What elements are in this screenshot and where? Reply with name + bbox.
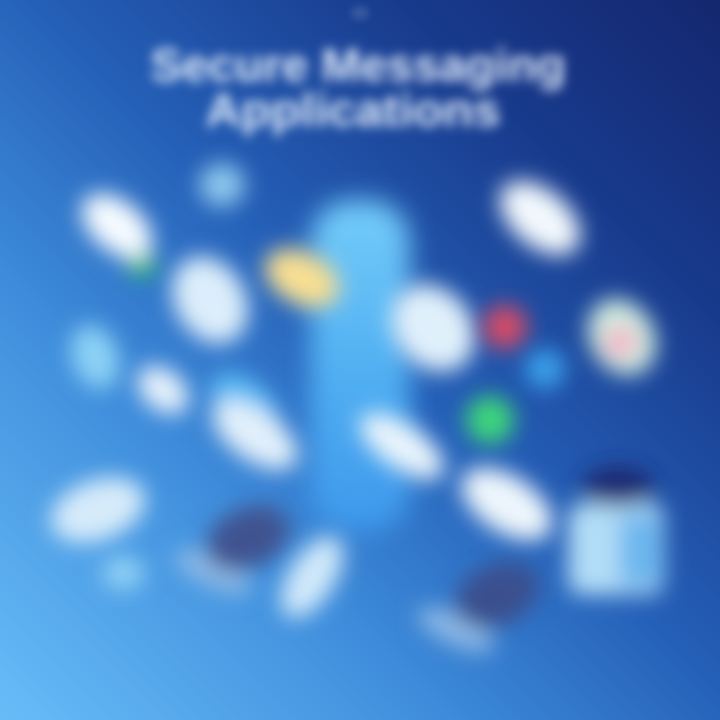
icon: blue square: [525, 349, 565, 389]
chat bubble: bottom center: [268, 526, 356, 628]
icon: laptop left: [169, 492, 301, 603]
icon: multicolor badge: [574, 286, 670, 388]
chat bubble: small left: [128, 356, 198, 424]
title: [150, 39, 566, 136]
title: Secure Messaging: [150, 39, 566, 91]
chat bubble: bottom left large: [42, 465, 154, 555]
icon: laptop right: [412, 549, 550, 661]
chat bubble: top right: [486, 166, 594, 270]
chat bubble: yellow: [254, 236, 350, 320]
chat bubble: far left pale: [62, 318, 128, 396]
chat bubble: lower left with blue top: [199, 361, 309, 484]
central phone: [310, 200, 410, 532]
chat bubble: upper left with green dot: [70, 180, 164, 277]
chat bubble: center right large: [374, 268, 492, 388]
chat bubble: left large: [157, 243, 263, 357]
icon: cube: [568, 466, 664, 595]
chat bubble: bottom left tiny: [102, 556, 144, 590]
icon: faint lock at top: [351, 6, 369, 20]
chat bubble: center lower: [349, 400, 455, 492]
title: Applications: [206, 84, 500, 136]
chat bubble: lower right: [449, 453, 565, 555]
icon: red square: [483, 305, 527, 349]
chat bubble: top small: [199, 163, 245, 207]
icon: green square: [466, 396, 514, 444]
